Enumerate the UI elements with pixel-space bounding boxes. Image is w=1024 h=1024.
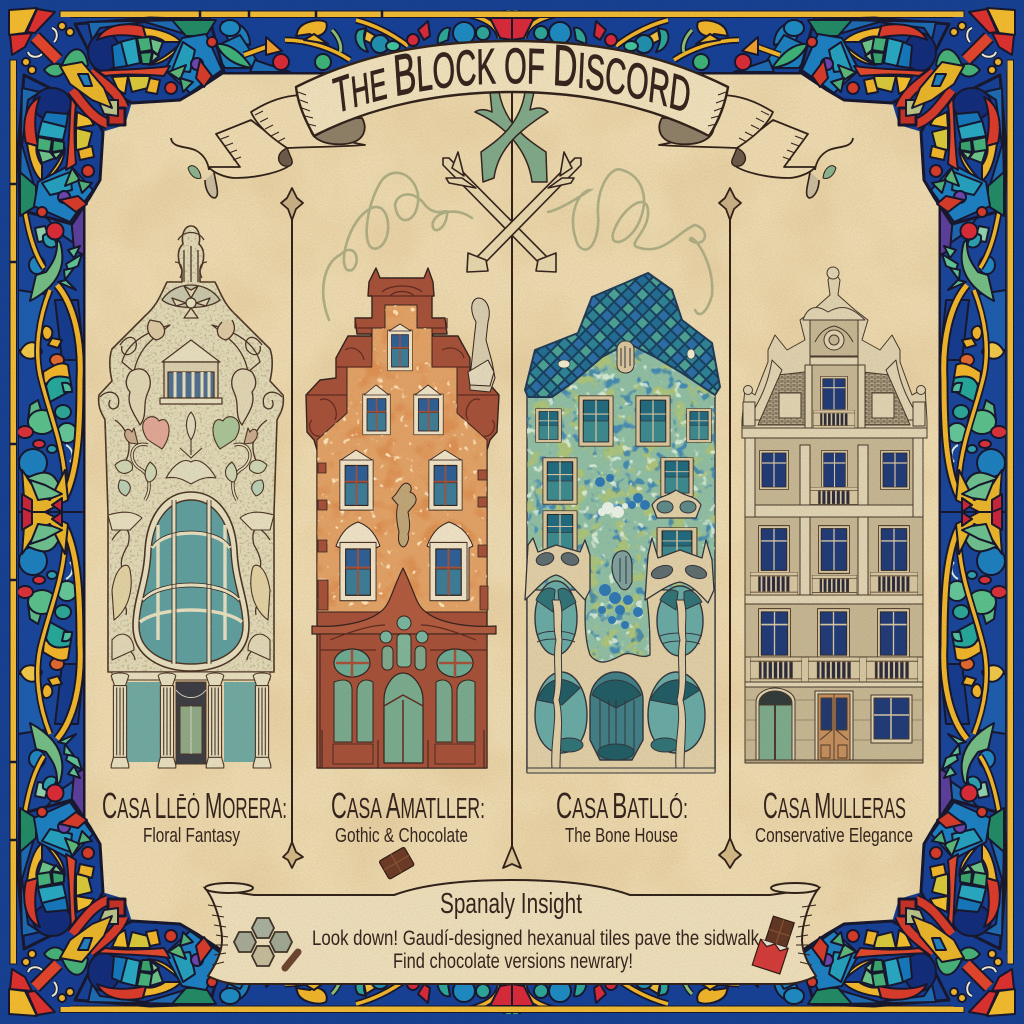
heading: casa amatller: CASA AMATLLER: <box>331 785 485 826</box>
gable ornaments <box>307 286 499 436</box>
long balcony <box>745 657 923 682</box>
bone columns <box>552 600 686 768</box>
panel: insight scroll <box>205 880 819 984</box>
squiggles: discord vines <box>323 169 712 320</box>
heading: casa lleo morera <box>102 785 287 847</box>
icon: cinnamon stick <box>285 952 298 968</box>
divider: right <box>719 188 741 868</box>
heading: casa batllo <box>556 785 688 847</box>
pilasters and cornices <box>745 438 923 604</box>
heading: casa amatller: Gothic & Chocolate <box>335 825 468 847</box>
ground floor windows <box>535 672 705 760</box>
building: casa lleo morera <box>95 225 287 768</box>
ground floor arcade <box>312 568 496 768</box>
crossed arrows <box>443 152 581 272</box>
heading: casa batllo: CASA BATLLÓ: <box>556 785 688 826</box>
windows top floors <box>820 376 848 412</box>
bay window <box>133 492 249 671</box>
central statue <box>392 483 416 547</box>
divider: left <box>281 188 303 868</box>
upper windows <box>536 409 561 442</box>
stucco piers <box>318 463 488 610</box>
attic vent <box>617 341 634 373</box>
title banner <box>0 41 853 198</box>
icon: chocolate bar <box>752 915 796 974</box>
heading: casa mulleras <box>755 785 913 847</box>
crossed ribbon emblem <box>475 92 548 182</box>
heading: casa mulleras: CASA MULLERAS <box>763 785 906 826</box>
windows middle floors <box>759 526 789 573</box>
title: THE BLOCK OF DISCORD <box>332 44 690 112</box>
divider: centre <box>503 92 521 868</box>
building: casa batllo <box>525 273 720 773</box>
heading: casa mulleras: Conservative Elegance <box>755 825 913 847</box>
insight text <box>312 927 759 973</box>
bone structure <box>527 590 715 772</box>
balconies <box>525 538 590 600</box>
heading: casa amatller <box>331 785 485 847</box>
finial and flower <box>100 232 282 660</box>
gable crest and attic <box>743 267 926 430</box>
ground floor doors <box>745 682 923 762</box>
roof scales <box>525 273 720 397</box>
building: casa amatller <box>300 268 500 768</box>
heading: casa lleo morera: CASA LLĒȮ MORERA: <box>102 785 287 826</box>
attic window <box>160 340 222 404</box>
first floor ovals <box>535 581 703 656</box>
heading: casa batllo: The Bone House <box>565 825 678 847</box>
insight heading: Spanaly Insight <box>440 888 582 920</box>
insight text: Look down! Gaudí-designed hexanual tiles pave the sidwalk <box>312 927 759 950</box>
door knocker ornament <box>612 551 632 590</box>
window grid <box>388 330 412 371</box>
icon: chocolate piece <box>379 847 414 880</box>
building: casa mulleras <box>742 267 927 763</box>
icon: hexagonal tiles <box>234 918 292 966</box>
small balcony <box>652 490 701 518</box>
heading: casa lleo morera: Floral Fantasy <box>143 825 240 847</box>
leaf ornaments <box>108 412 274 660</box>
ground floor columns and door <box>111 672 271 768</box>
turret statue <box>468 298 495 392</box>
insight text: Find chocolate versions newrary! <box>393 950 633 973</box>
